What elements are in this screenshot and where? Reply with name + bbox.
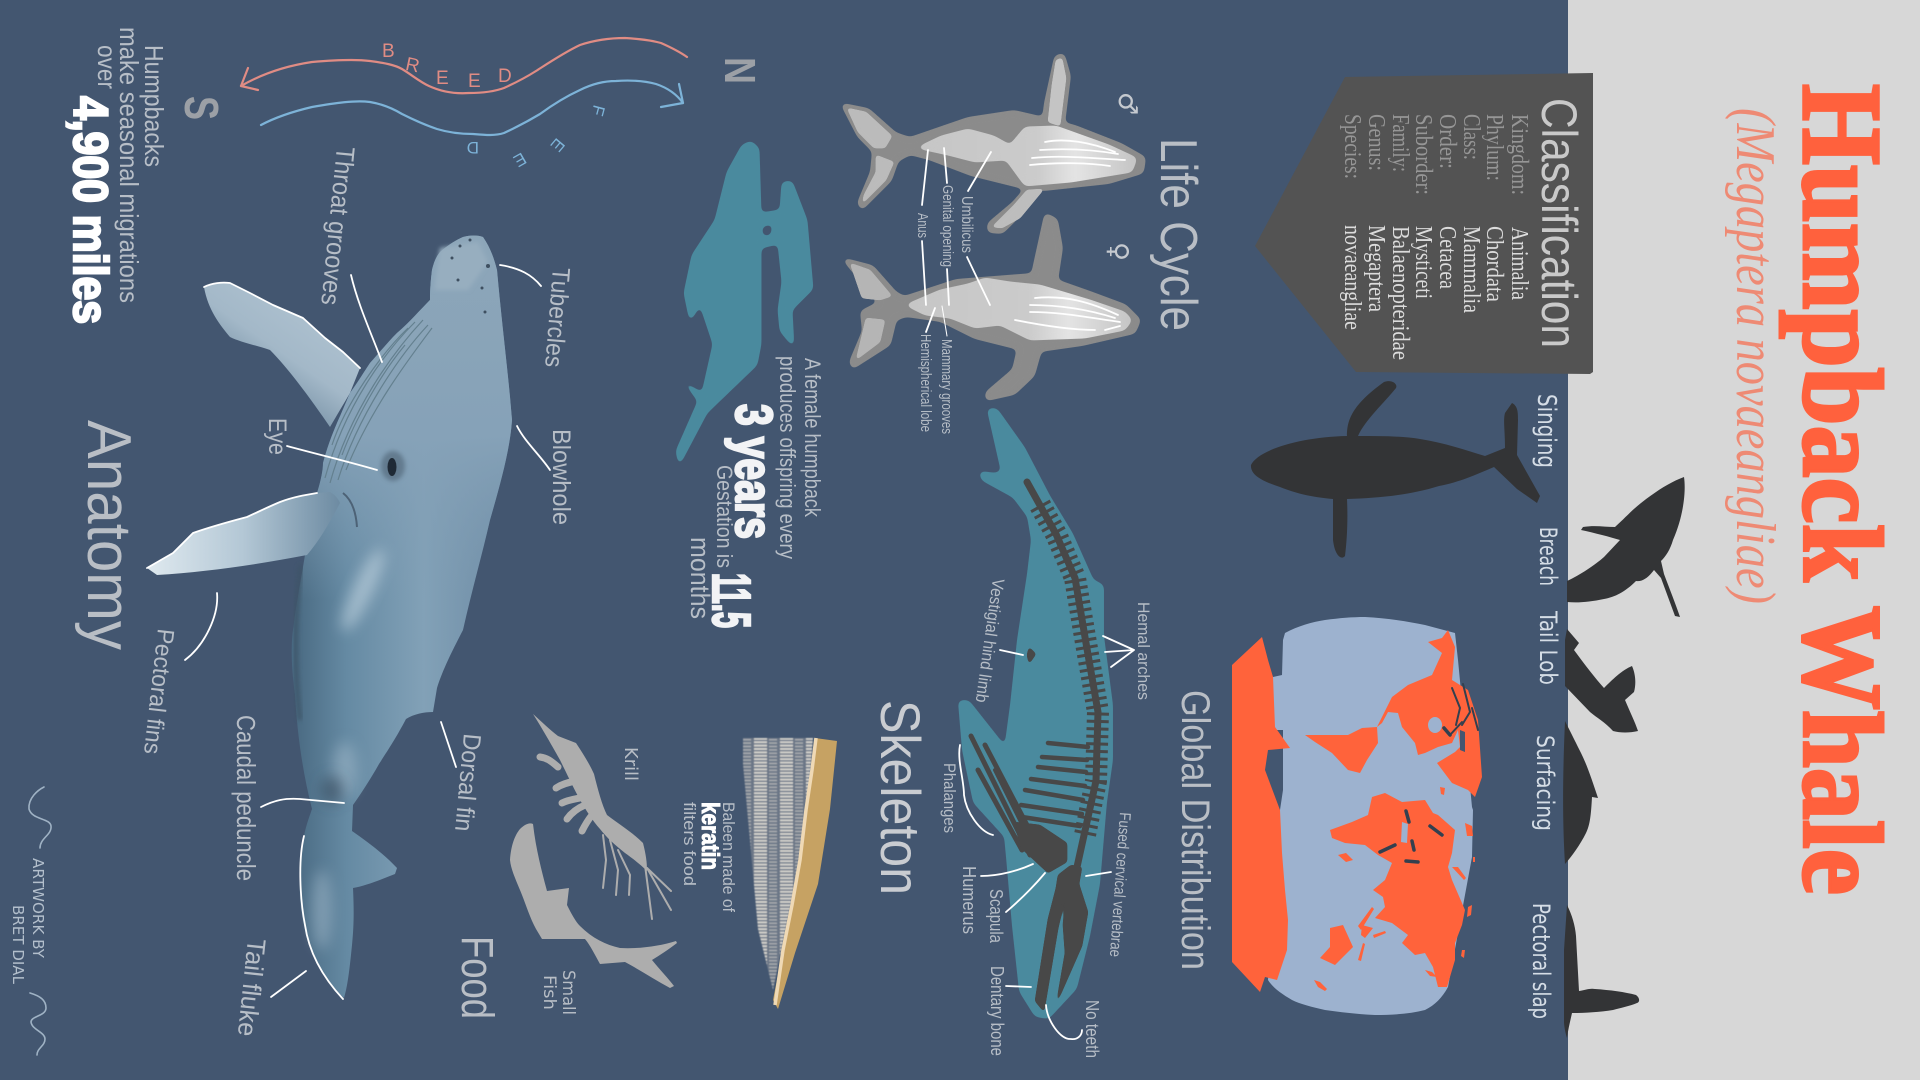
label: breed xyxy=(382,41,512,92)
callouts: anatomy labels: Tail fluke xyxy=(232,937,272,1038)
icon: krill xyxy=(533,714,671,919)
label: umbilicus: Umbilicus xyxy=(958,196,975,253)
label: krill: Krill xyxy=(620,747,641,781)
label: feed: E xyxy=(547,134,568,155)
callouts: anatomy labels: Dorsal fin xyxy=(449,732,486,833)
callouts: anatomy labels: Blowhole xyxy=(547,429,575,525)
text: offspring and gestation: A female humpback xyxy=(800,358,825,518)
label: north: N xyxy=(715,57,764,84)
label: feed xyxy=(467,103,608,171)
label: mammary grooves: Mammary grooves xyxy=(938,339,955,434)
map: North America xyxy=(1377,630,1482,797)
text: offspring and gestation: Gestation is xyxy=(712,465,737,568)
stat: 3 years: 3 years xyxy=(724,404,782,539)
credit: artwork: ARTWORK BY xyxy=(29,858,47,959)
callouts: skeleton labels: Phalanges xyxy=(940,763,959,833)
text: migration: over xyxy=(92,45,122,89)
panel: classification xyxy=(1255,73,1593,374)
label: small fish: Fish xyxy=(539,975,559,1010)
label: breach: Breach xyxy=(1534,527,1562,586)
stat: 4,900 miles: 4,900 miles xyxy=(63,96,116,324)
classification labels: Phylum: xyxy=(1481,114,1507,181)
text: offspring and gestation: months xyxy=(685,537,715,619)
classification heading: Classification xyxy=(1531,98,1587,348)
text: baleen: filters food xyxy=(680,802,699,886)
callouts: anatomy labels: Tubercles xyxy=(539,267,575,368)
classification labels: Suborder: xyxy=(1410,114,1436,195)
classification labels: Class: xyxy=(1458,114,1484,160)
classification labels xyxy=(1339,114,1532,195)
classification values: Cetacea xyxy=(1434,226,1460,289)
classification arrow shape xyxy=(1255,73,1593,374)
callouts: anatomy labels: Eye xyxy=(263,418,291,455)
map: Baffin strait xyxy=(1460,730,1465,752)
classification values: Balaenopteridae xyxy=(1387,226,1413,360)
callouts: skeleton labels: Humerus xyxy=(959,866,979,934)
panel: anatomy xyxy=(74,145,575,1038)
callouts: anatomy labels: Throat grooves xyxy=(315,145,361,307)
panel: life cycle xyxy=(843,55,1207,434)
text: baleen xyxy=(680,802,738,912)
whale body outline xyxy=(960,410,1111,1017)
icon: surfacing whale silhouette xyxy=(1563,721,1598,864)
label: hemispherical lobe: Hemispherical lobe xyxy=(917,334,934,432)
classification labels: Family: xyxy=(1387,114,1413,172)
label: breed: R xyxy=(404,54,421,77)
callouts: skeleton labels: Fused cervical vertebrae xyxy=(1106,812,1133,958)
map: Hudson bay and inland seas xyxy=(1385,717,1442,843)
arrow: feed route xyxy=(261,81,683,135)
classification values: Mammalia xyxy=(1458,226,1484,313)
callouts: skeleton labels: Dentary bone xyxy=(987,966,1007,1056)
whale: male underside xyxy=(843,55,1144,232)
skeleton bones xyxy=(971,482,1098,867)
map: dark lakes and archipelago xyxy=(1380,684,1478,862)
label: breed: E xyxy=(468,71,481,92)
label: surfacing: Surfacing xyxy=(1531,735,1559,831)
label: feed: D xyxy=(467,138,479,157)
heading: global distribution: Global Distribution xyxy=(1173,690,1217,970)
callouts: skeleton labels: Hemal arches xyxy=(1134,602,1153,700)
callouts: anatomy labels xyxy=(138,145,575,1038)
text: migration: make seasonal migrations xyxy=(114,27,144,303)
classification labels: Order: xyxy=(1434,114,1460,169)
classification values: Chordata xyxy=(1481,226,1507,302)
callouts: anatomy labels: Pectoral fins xyxy=(138,627,179,756)
panel: global distribution map xyxy=(1232,617,1482,1015)
illustration: baleen plate xyxy=(743,738,837,1009)
callouts: anatomy labels: Caudal peduncle xyxy=(231,715,261,881)
text: migration: Humpbacks xyxy=(139,45,169,167)
icon: singing whale silhouette xyxy=(1251,381,1540,558)
arrow: breed route xyxy=(241,38,687,93)
icon: eye xyxy=(381,451,405,481)
heading: life cycle: Life Cycle xyxy=(1149,138,1207,331)
heading: anatomy: Anatomy xyxy=(74,420,143,650)
map: Antarctica xyxy=(1232,637,1290,992)
callout labels and leader lines xyxy=(914,148,991,434)
classification values xyxy=(1339,225,1532,360)
label: genital opening: Genital opening xyxy=(939,185,956,267)
callouts: skeleton labels: Scapula xyxy=(986,889,1006,944)
icon: pectoral slap silhouette xyxy=(1564,905,1639,1038)
classification values: novaeangliae xyxy=(1339,225,1365,330)
map: South America xyxy=(1305,727,1378,773)
classification values: Megaptera xyxy=(1363,225,1389,312)
icon: small fish xyxy=(510,823,677,988)
label: feed: E xyxy=(510,149,530,171)
classification labels: Genus: xyxy=(1363,114,1389,171)
label: feed: F xyxy=(587,103,608,118)
label: breed: B xyxy=(382,41,395,62)
text: offspring and gestation xyxy=(685,356,825,628)
heading: food: Food xyxy=(452,936,503,1019)
label: breed: E xyxy=(436,68,449,89)
icon: male symbol: ♂ xyxy=(1112,92,1142,115)
leader lines: skeleton xyxy=(959,636,1134,1039)
label: small fish: Small xyxy=(558,970,578,1015)
label: small fish xyxy=(539,970,578,1015)
icon: female symbol: ♀ xyxy=(1103,242,1133,261)
map ocean xyxy=(1268,617,1473,1015)
classification labels: Kingdom: xyxy=(1506,114,1532,195)
stat: keratin: keratin xyxy=(696,802,724,870)
text: migration xyxy=(63,27,169,324)
leader lines xyxy=(922,148,991,336)
illustration: humpback whale xyxy=(147,236,512,999)
label: singing: Singing xyxy=(1531,394,1561,468)
callouts: skeleton labels: No teeth xyxy=(1082,1000,1102,1058)
credit: artwork xyxy=(9,787,51,1055)
label: south: S xyxy=(174,96,227,120)
classification values: Mysticeti xyxy=(1410,226,1436,299)
credit: artwork: BRET DIAL xyxy=(9,905,27,985)
whale: female underside xyxy=(845,215,1139,399)
callouts: skeleton labels xyxy=(940,577,1153,1058)
stat: 11.5: 11.5 xyxy=(701,573,761,628)
text: baleen: Baleen made of xyxy=(719,802,738,912)
icon: tail lob silhouette xyxy=(1565,629,1638,732)
label: breed: D xyxy=(498,66,512,87)
illustration: mother and calf xyxy=(676,141,813,466)
panel: food xyxy=(452,714,677,1019)
heading: skeleton: Skeleton xyxy=(869,700,932,895)
label: anus: Anus xyxy=(914,213,931,238)
map: Africa and Eurasia xyxy=(1330,793,1465,987)
icon: breach whale silhouette xyxy=(1567,477,1685,617)
text: offspring and gestation: produces offspring every xyxy=(775,356,800,559)
classification values: Animalia xyxy=(1506,227,1532,300)
callouts: skeleton labels: Vestigial hind limb xyxy=(972,577,1008,704)
label: pectoral slap: Pectoral slap xyxy=(1527,903,1555,1019)
classification labels: Species: xyxy=(1339,114,1365,179)
title: Humpback Whale xyxy=(1779,84,1904,895)
leader lines: anatomy xyxy=(185,265,550,997)
panel: migration xyxy=(63,27,764,324)
panel: skeleton xyxy=(869,410,1153,1058)
scientific name subtitle: (Megaptera novaeangliae) xyxy=(1724,108,1786,604)
title panel xyxy=(1568,0,1920,1080)
map: Australia and islands xyxy=(1314,787,1475,991)
label: tail lob: Tail Lob xyxy=(1534,610,1562,685)
